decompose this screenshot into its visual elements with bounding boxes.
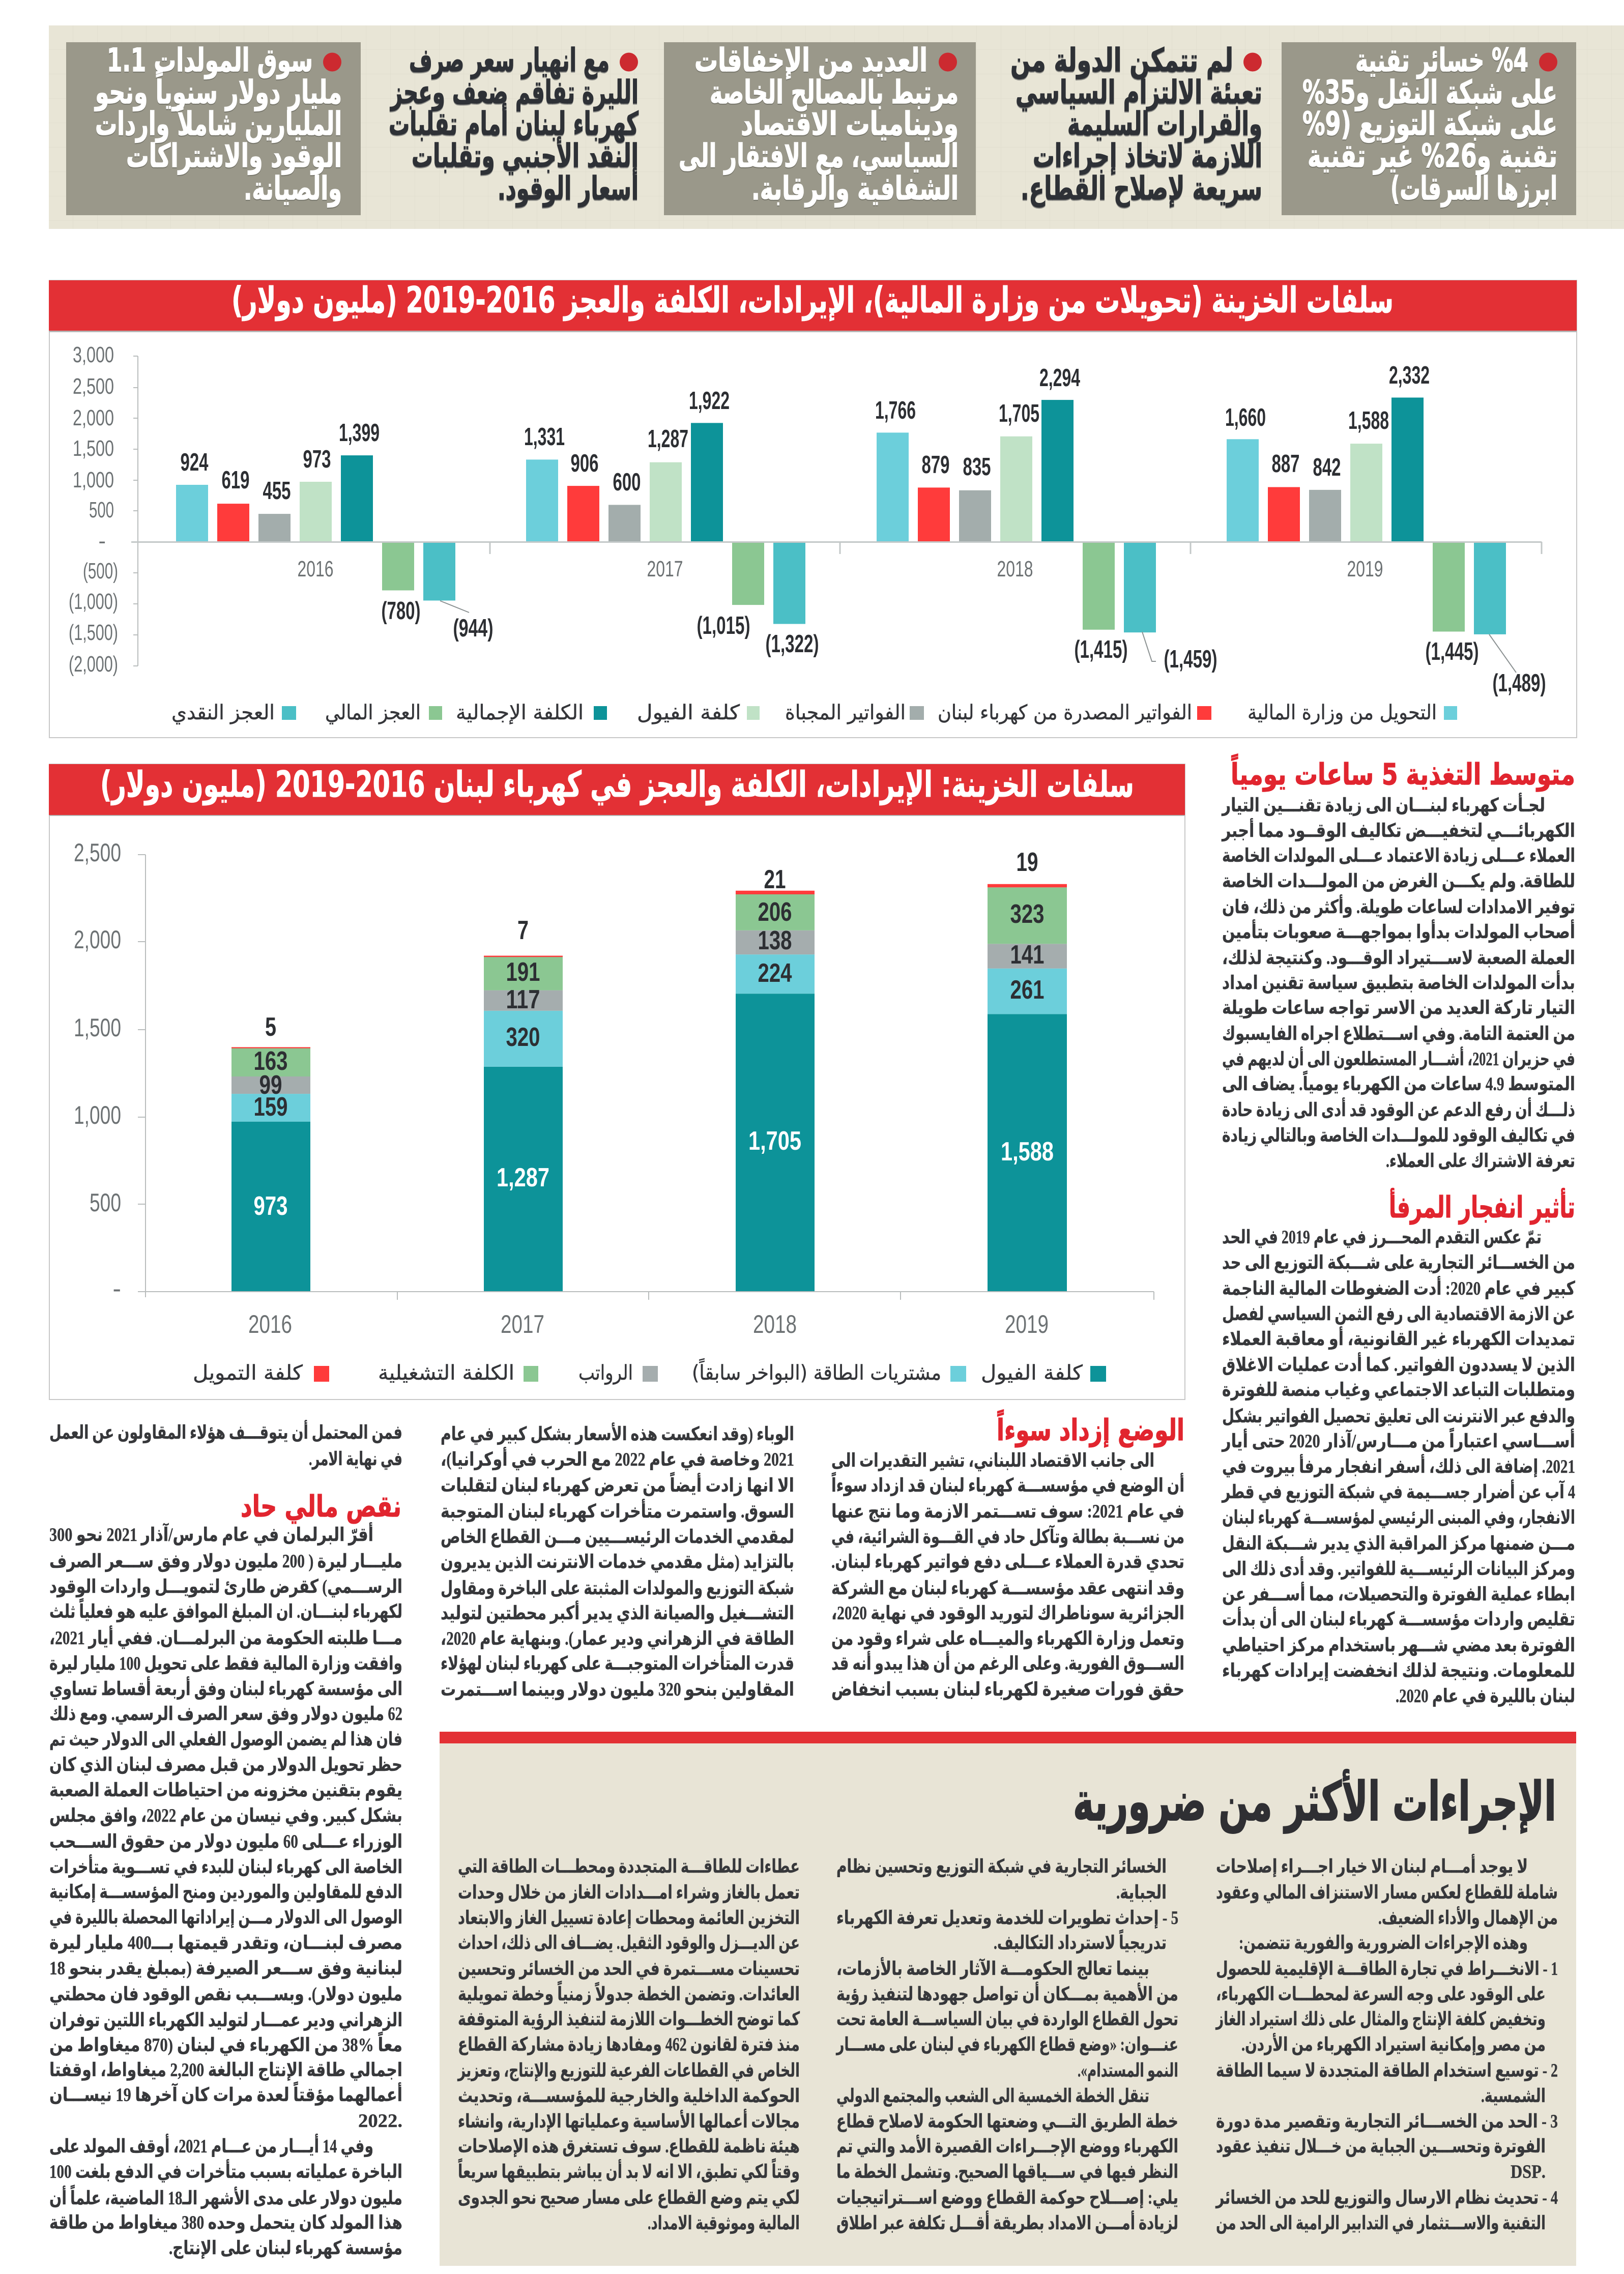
- chart title: سلفات الخزينة: الإيرادات، الكلفة والعجز في كهرباء لبنان 2016-2019 (مليون دولار): [100, 764, 1134, 806]
- text column: left: منذ فترة لقانون 462 ومفادها زيادة مشاركة القطاع: [458, 2034, 800, 2055]
- year labels: [248, 1310, 1049, 1338]
- text block: situation worsened: الى جانب الاقتصاد اللبناني، تشير التقديرات الى: [831, 1450, 1154, 1471]
- stacked data labels: 1,588: [1001, 1137, 1054, 1167]
- text column: middle: خطة الطريق التـــي وضعتها الحكومة لاصلاح قطاع: [836, 2111, 1178, 2132]
- data labels: 1,766: [875, 397, 916, 424]
- text block: situation worsened: من نســـبة بطالة وتآكل حاد في القـــوة الشرائية، في: [831, 1525, 1184, 1548]
- year labels: 2016: [297, 557, 334, 581]
- icon: red bullet political commitment: [1243, 53, 1262, 71]
- year labels: 2018: [997, 557, 1033, 581]
- text column: right: .DSP: [1511, 2162, 1546, 2182]
- text block: situation worsened: وتعمل وزارة الكهرباء والميـــاه على شراء وقود من: [831, 1628, 1184, 1649]
- text block: middle column: السوق. واستمرت متأخرات كهرباء لبنان المتوجبة: [441, 1499, 794, 1522]
- stacked data labels: 224: [758, 958, 792, 988]
- stacked data labels: 19: [1017, 848, 1038, 877]
- text column: left: العائدات. وتضمن الخطة جدولاً زمنياً وخطة تمويلية: [458, 1980, 800, 2005]
- data labels: 1,705: [999, 400, 1039, 427]
- callout: failures: السياسي، مع الافتقار الى: [679, 137, 959, 174]
- text block: middle column: التشـــغيل والصيانة الذي يدير أكبر محطتين لتوليد: [441, 1600, 794, 1624]
- icon: red bullet generators market: [323, 53, 341, 71]
- icon: red bullet exchange rate: [620, 53, 638, 71]
- callout: political commitment: تعبئة الالتزام السياسي: [1016, 74, 1262, 111]
- text block: middle column: المقاولين بنحو 320 مليون دولار وبينما اســـتمرت: [441, 1679, 794, 1700]
- text column: left: لكي يتم وضع القطاع على مسار صحيح نحو الجدوى: [458, 2188, 800, 2208]
- text column: middle: تحول القطاع الواردة في بيان السياســـة العامة تحت: [836, 2009, 1178, 2030]
- y axis: (1,000): [69, 589, 118, 614]
- stacked data labels: 163: [253, 1046, 288, 1076]
- text block: fiscal shortage: مـــا طلبته الحكومة من البرلمـــان. ففي أيار 2021،: [49, 1625, 402, 1649]
- text block: fiscal shortage: أعمالهما مؤقتاً لعدة مرات كان آخرها 19 نيســـان: [49, 2081, 402, 2106]
- data labels: [180, 362, 1546, 697]
- text column: left: الخاص في القطاعات الفرعية للتوزيع والإنتاج، وتعزيز: [457, 2060, 800, 2081]
- year labels: 2019: [1347, 557, 1383, 581]
- text column: middle: 5 - إحداث تطويرات للخدمة وتعديل تعرفة الكهرباء: [836, 1908, 1178, 1929]
- panel: stacked cost chart: [49, 764, 1185, 1400]
- data labels: (1,489): [1493, 669, 1546, 697]
- text block: middle column: 2021 وخاصة في عام 2022 مع الحرب في أوكرانيا)،: [441, 1447, 794, 1471]
- y axis: 1,500: [73, 436, 114, 461]
- text block: fiscal shortage: الى مؤسسة كهرباء لبنان وفق أربعة أقساط تساوي: [49, 1676, 402, 1700]
- text block: left column intro: فمن المحتمل أن يتوقـــف هؤلاء المقاولون عن العمل: [49, 1420, 402, 1443]
- text block: average supply: المتوسط 4.9 ساعات من الكهرباء يومياً. يضاف الى: [1222, 1070, 1575, 1095]
- text block: fiscal shortage: فان هذا لم يضمن الوصول الفعلي الى الدولار حيث تم: [49, 1729, 402, 1750]
- text block: port explosion: تمّ عكس التقدم المحـــرز في عام 2019 في الحد: [1222, 1227, 1542, 1248]
- y axis: 500: [89, 498, 114, 522]
- y axis: [74, 838, 146, 1303]
- icon: red bullet failures: [939, 53, 957, 71]
- text column: middle: لزيادة أمـــن الامداد بطريقة أقـــل تكلفة عبر اطلاق: [836, 2210, 1178, 2234]
- callout: exchange rate: مع انهيار سعر صرف: [409, 42, 610, 79]
- text block: average supply: لجـأت كهرباء لبنـــان الى زيادة تقنـــين التيار: [1221, 793, 1545, 816]
- y axis: 1,500: [74, 1013, 121, 1042]
- text block: fiscal shortage: وفي 14 أيـــار من عـــام 2021، أوقف المولد على: [49, 2134, 373, 2158]
- callout: political commitment: سريعة لإصلاح القطاع.: [1021, 170, 1262, 208]
- y axis: 500: [90, 1188, 121, 1217]
- y axis: 3,000: [73, 342, 114, 367]
- callout: political commitment: اللازمة لاتخاذ إجراءات: [1033, 137, 1262, 175]
- text block: fiscal shortage: حظر تحويل الدولار من قبل مصرف لبنان الذي كان: [49, 1755, 402, 1775]
- data labels: 842: [1313, 454, 1341, 481]
- y axis: (1,500): [69, 620, 118, 645]
- text block: fiscal shortage: أقرّ البرلمان في عام مارس/آذار 2021 نحو 300: [49, 1522, 373, 1546]
- callout: generators market: مليار دولار سنوياً ونحو: [94, 70, 342, 111]
- text block: port explosion: أســـاسي اعتباراً من مـــارس/آذار 2020 حتى أيار: [1221, 1427, 1575, 1452]
- callout: exchange rate: كهرباء لبنان أمام تقلبات: [389, 103, 639, 143]
- text column: middle: النظر فيها في ســـياقها الصحيح. وتشمل الخطة ما: [836, 2162, 1178, 2182]
- text block: fiscal shortage: لكهرباء لبنـــان. ان المبلغ الموافق عليه هو فعلياً ثلث: [49, 1598, 402, 1622]
- text column: right: لا يوجد أمـــام لبنان الا خيار اجـــراء إصلاحات: [1216, 1854, 1528, 1878]
- data labels: 1,922: [689, 387, 730, 415]
- legend: كلفة الفيول: [981, 1361, 1083, 1385]
- text column: left: وقتاً لكي تطبق، الا انه لا بد أن يباشر بتطبيقها سريعاً: [458, 2158, 800, 2182]
- y axis: 1,000: [73, 468, 114, 492]
- callout: failures: [679, 42, 959, 208]
- text column: right: [1215, 1854, 1558, 2234]
- text block: left column intro: في نهاية الامر.: [309, 1449, 402, 1470]
- text column: right: وهذه الإجراءات الضرورية والفورية تتضمن:: [1239, 1933, 1528, 1954]
- stacked data labels: [253, 848, 1054, 1221]
- text column: middle: من الأهمية بمـــكان أن تواصل جهودها لتنفيذ رؤية: [836, 1981, 1178, 2005]
- text block: situation worsened: [831, 1450, 1184, 1700]
- text column: left: الحوكمة الداخلية والخارجية للمؤسســـة، وتحديث: [458, 2086, 800, 2107]
- callout: generators market: المليارين شاملاً واردات: [95, 104, 342, 143]
- data labels: (1,322): [765, 630, 819, 658]
- data labels: 1,588: [1348, 407, 1389, 434]
- callout: failures: مرتبط بالمصالح الخاصة: [710, 74, 959, 111]
- y axis: (500): [83, 559, 118, 584]
- text block: fiscal shortage: الوصول الى الدولار مـــن إيراداتها المحصلة بالليرة في: [49, 1907, 402, 1928]
- y axis: -: [98, 529, 106, 553]
- data labels: 906: [571, 450, 598, 477]
- text block: left column intro: [49, 1420, 402, 1470]
- data labels: 1,660: [1225, 404, 1266, 431]
- stacked data labels: 21: [764, 865, 786, 894]
- text column: middle: يلي: إصـــلاح حوكمة القطاع ووضع اســـتراتيجيات: [836, 2188, 1178, 2208]
- data labels: 835: [963, 453, 991, 481]
- callout: technical losses: %4 خسائر تقنية: [1355, 42, 1528, 79]
- data labels: 619: [222, 467, 249, 494]
- text column: right: 3 - الحد من الخســـائر التجارية وتقصير مدة دورة: [1216, 2111, 1558, 2132]
- text block: fiscal shortage: لبنانية وفق ســـعر الصيرفة (بمبلغ يقدر بنحو 18: [49, 1958, 402, 1979]
- box: generators market background: [66, 42, 361, 215]
- y axis: 2,500: [74, 838, 121, 867]
- year labels: 2017: [501, 1310, 544, 1338]
- text block: port explosion: لبنان بالليرة في عام 2020.: [1396, 1686, 1575, 1707]
- callout: political commitment: لم تتمكن الدولة من: [1010, 42, 1233, 79]
- legend: كلفة التمويل: [193, 1361, 303, 1385]
- stacked data labels: 5: [265, 1012, 276, 1042]
- data labels: 1,399: [339, 419, 380, 447]
- data labels: 1,331: [524, 423, 565, 451]
- text block: situation worsened: أن الوضع في مؤسســـة كهرباء لبنان قد ازداد سوءاً: [831, 1472, 1184, 1496]
- y axis: -: [112, 1274, 121, 1303]
- callout: generators market: [94, 42, 342, 208]
- icon: red bullet technical losses: [1539, 53, 1557, 71]
- callout: exchange rate: الليرة تفاقم ضعف وعجز: [390, 74, 639, 111]
- stacked data labels: 141: [1010, 940, 1044, 970]
- callout: technical losses: تقنية و26% غير تقنية: [1308, 137, 1557, 175]
- text block: fiscal shortage: مؤسسة كهرباء لبنان على الإنتاج.: [169, 2238, 402, 2259]
- stacked bars: [138, 884, 1154, 1300]
- text block: middle column: لمقدمي الخدمات الرئيســـيين مـــن القطاع الخاص: [441, 1527, 794, 1548]
- text block: fiscal shortage: معاً %38 من الكهرباء في لبنان (870 ميغاواط من: [49, 2031, 402, 2056]
- legend: الكلفة الإجمالية: [456, 701, 584, 724]
- callout: exchange rate: النقد الأجنبي وتقلبات: [412, 136, 639, 175]
- data labels: (944): [453, 615, 494, 642]
- text block: fiscal shortage: الباخرة عملياته بسبب متأخرات في الدفع بلغت 100: [49, 2159, 402, 2182]
- heading: fiscal shortage: نقص مالي حاد: [241, 1489, 401, 1524]
- text block: situation worsened: الجزائرية سوناطراك لتوريد الوقود في نهاية 2020،: [831, 1603, 1184, 1624]
- text column: middle: تدريجياً لاسترداد التكاليف.: [994, 1929, 1167, 1954]
- text block: average supply: [1221, 793, 1575, 1172]
- text block: fiscal shortage: الدفع للمقاولين والموردين ومنح المؤسســـة إمكانية: [49, 1882, 402, 1903]
- text column: middle: بينما تعالج الحكومـــة الآثار الخاصة بالأزمات،: [836, 1957, 1149, 1979]
- callout: generators market: والصيانة.: [244, 170, 342, 208]
- text block: fiscal shortage: الوزراء عـــلى 60 مليون دولار من حقوق الســـحب: [49, 1831, 402, 1852]
- panel: most necessary measures: [440, 1732, 1576, 2266]
- stacked data labels: 117: [506, 985, 540, 1014]
- stacked data labels: 7: [517, 916, 529, 945]
- text column: middle: تنقل الخطة الخمسية الى الشعب والمجتمع الدولي: [836, 2086, 1149, 2107]
- callout: political commitment: والقرارات السليمة: [1067, 105, 1262, 143]
- callout: exchange rate: أسعار الوقود.: [498, 167, 639, 208]
- text block: fiscal shortage: مليـــار ليرة ( 200 مليون دولار وفق ســـعر الصرف: [49, 1551, 402, 1572]
- panel: treasury advances chart: [49, 279, 1577, 738]
- stacked data labels: 191: [506, 957, 540, 987]
- data labels: (1,445): [1426, 638, 1478, 665]
- text column: middle: الكهرباء ووضع الإجـــراءات القصيرة الأمد والتي تم: [836, 2134, 1178, 2157]
- text column: left: [457, 1856, 800, 2234]
- text block: fiscal shortage: [49, 1522, 402, 2259]
- stacked data labels: 973: [253, 1191, 288, 1221]
- data labels: (1,015): [697, 612, 750, 639]
- stacked data labels: 1,287: [497, 1163, 549, 1192]
- callout: generators market: الوقود والاشتراكات: [126, 137, 342, 175]
- stacked data labels: 206: [758, 897, 792, 927]
- legend: العجز المالي: [325, 701, 421, 724]
- legend: التحويل من وزارة المالية: [1248, 701, 1437, 724]
- box: failures background: [664, 42, 976, 215]
- bars: [131, 398, 1542, 673]
- text block: situation worsened: وقد انتهى عقد مؤسســـة كهرباء لبنان مع الشركة: [831, 1578, 1184, 1599]
- callout: failures: وديناميات الاقتصاد: [741, 105, 959, 143]
- stacked data labels: 159: [253, 1092, 288, 1122]
- text block: average supply: في حزيران 2021، أشـــار المستطلعون الى أن لديهم في: [1222, 1046, 1575, 1070]
- text block: fiscal shortage: هذا المولد كان يتحمل وحده 380 ميغاواط من طاقة: [49, 2212, 402, 2233]
- year labels: 2018: [753, 1310, 797, 1338]
- text block: middle column: الا انها زادت أيضاً من تعرض كهرباء لبنان لتقلبات: [441, 1472, 794, 1496]
- text block: fiscal shortage: مصرف لبنـــان، وتقدر قيمتها بـــ400 مليار ليرة: [49, 1933, 402, 1954]
- callout: exchange rate: [389, 42, 639, 208]
- text column: middle: الجباية.: [1116, 1882, 1167, 1903]
- text block: fiscal shortage: الخاصة الى كهرباء لبنان للبدء في تســـوية متأخرات: [49, 1854, 402, 1878]
- text column: middle: الخسائر التجارية في شبكة التوزيع وتحسين نظام: [836, 1856, 1167, 1878]
- data labels: 455: [263, 477, 291, 505]
- stacked data labels: 99: [259, 1070, 282, 1100]
- legend: كلفة الفيول: [637, 701, 740, 724]
- callout: failures: الشفافية والرقابة.: [751, 170, 959, 208]
- heading: average supply: متوسط التغذية 5 ساعات يومياً: [1231, 753, 1575, 792]
- legend: الكلفة التشغيلية: [378, 1361, 514, 1385]
- callout: political commitment: [1010, 42, 1262, 208]
- legend: الفواتير المصدرة من كهرباء لبنان: [938, 701, 1192, 724]
- data labels: (1,459): [1164, 646, 1217, 673]
- text block: fiscal shortage: يقوم بتقنين مخزونه من احتياطات العملة الصعبة: [49, 1780, 402, 1801]
- stacked data labels: 138: [758, 926, 792, 955]
- text column: middle: [836, 1856, 1178, 2234]
- y axis: [69, 342, 138, 677]
- text column: left: المالية وموثوقية الامداد.: [648, 2213, 800, 2234]
- y axis: (2,000): [69, 652, 118, 677]
- text block: middle column: بالتزايد (مثل مقدمي خدمات الانترنت الذين يديرون: [441, 1552, 794, 1572]
- callout: generators market: سوق المولدات 1.1: [107, 42, 313, 79]
- legend: [193, 1358, 1106, 1385]
- text column: right: من الإهمال والأداء الضعيف.: [1378, 1906, 1558, 1929]
- text column: left: مجالات أعمالها الأساسية وعملياتها الإدارية، وانشاء: [458, 2109, 800, 2132]
- data labels: 973: [303, 446, 331, 473]
- text block: middle column: قدرت المتأخرات المتوجبـــة على كهرباء لبنان لهؤلاء: [441, 1651, 794, 1674]
- heading: situation worsened: الوضع إزداد سوءاً: [997, 1409, 1184, 1448]
- legend: العجز النقدي: [171, 701, 275, 724]
- text block: situation worsened: الســـوق الفورية. وعلى الرغم من أن هذا يبدو أنه قد: [831, 1651, 1184, 1674]
- stacked data labels: 261: [1010, 975, 1044, 1005]
- y axis: 1,000: [74, 1101, 121, 1129]
- text block: port explosion: [1221, 1227, 1575, 1707]
- box: technical losses background: [1282, 42, 1576, 215]
- data labels: (780): [382, 597, 420, 625]
- legend: [171, 701, 1457, 724]
- text column: left: عن الديـــزل والوقود الثقيل. يضـــاف الى ذلك، احداث: [458, 1933, 800, 1954]
- text block: fiscal shortage: الزهراني ودير عمـــار لتوليد الكهرباء اللتين توفران: [49, 2010, 402, 2031]
- text column: middle: عنـــوان: «وضع قطاع الكهرباء في لبنان على مســـار: [836, 2034, 1178, 2055]
- y axis: 2,500: [73, 374, 114, 399]
- stacked data labels: 323: [1010, 899, 1044, 929]
- legend: الفواتير المجباة: [785, 701, 906, 724]
- year labels: 2016: [248, 1310, 292, 1338]
- data labels: 2,332: [1389, 362, 1430, 389]
- text block: fiscal shortage: بشكل كبير. وفي نيسان من عام 2022، وافق مجلس: [49, 1805, 402, 1827]
- text block: fiscal shortage: .2022: [358, 2111, 402, 2132]
- text block: situation worsened: تحدي قدرة العملاء عـــلى دفع فواتير كهرباء لبنان.: [831, 1552, 1184, 1572]
- callout: technical losses: [1302, 42, 1557, 207]
- data labels: (1,415): [1075, 636, 1127, 663]
- text column: left: تعمل بالغاز وشراء امـــدادات الغاز من خلال وحدات: [458, 1882, 800, 1903]
- data labels: 2,294: [1039, 364, 1080, 392]
- text block: middle column: [441, 1422, 794, 1700]
- text block: fiscal shortage: اجمالي طاقة الإنتاج البالغة 2,200 ميغاواط، اوقفتا: [49, 2060, 402, 2081]
- data labels: 879: [922, 451, 949, 479]
- text block: middle column: الوباء (وقد انعكست هذه الأسعار بشكل كبير في عام: [441, 1422, 794, 1445]
- text block: fiscal shortage: وافقت وزارة المالية فقط على تحويل 100 مليار ليرة: [49, 1653, 402, 1674]
- text block: fiscal shortage: الرســـمي) كقرض طارئ لتمويـــل واردات الوقود: [49, 1577, 402, 1597]
- text column: left: كما توضح الخطـــوات اللازمة لتنفيذ الرؤية المتوقفة: [458, 2009, 800, 2030]
- panel: key findings band: [49, 25, 1624, 229]
- text column: right: الشمسية.: [1481, 2086, 1546, 2107]
- text block: port explosion: 2021. إضافة الى ذلك، أسفر انفجار مرفأ بيروت في: [1222, 1454, 1575, 1477]
- y axis: 2,000: [74, 925, 121, 954]
- text block: fiscal shortage: مليون دولار). وبســـبب نقص الوقود فان محطتي: [49, 1984, 402, 2005]
- data labels: 887: [1272, 450, 1299, 478]
- text block: port explosion: كبير في عام 2020: أدت الضغوطات المالية الناجمة: [1222, 1276, 1575, 1300]
- text block: middle column: الطاقة في الزهراني ودير عمار). وبنهاية عام 2020،: [441, 1628, 794, 1650]
- legend: مشتريات الطاقة (البواخر سابقاً): [692, 1358, 941, 1385]
- text block: situation worsened: في عام 2021: سوف تســـتمر الازمة وما نتج عنها: [831, 1501, 1184, 1523]
- y axis: 2,000: [73, 405, 114, 430]
- legend: الرواتب: [578, 1361, 633, 1385]
- text block: middle column: شبكة التوزيع والمولدات المثبتة على الباخرة ومقاول: [441, 1578, 794, 1599]
- year labels: 2017: [647, 557, 683, 581]
- text column: left: هيئة ناظمة للقطاع. سوف تستغرق هذه الإصلاحات: [458, 2136, 800, 2157]
- stacked data labels: 320: [506, 1023, 540, 1052]
- text block: fiscal shortage: مليون دولار على مدى الأشهر الـ18 الماضية، علماً أن: [49, 2184, 402, 2209]
- text block: situation worsened: حقق فورات صغيرة لكهرباء لبنان بسبب انخفاض: [831, 1679, 1184, 1700]
- text column: middle: النمو المستدام».: [1078, 2060, 1178, 2082]
- text column: left: عطاءات للطاقـــة المتجددة ومحطـــات الطاقة التي: [458, 1856, 800, 1877]
- text column: left: التخزين العائمة ومحطات إعادة تسييل الغاز والابتعاد: [458, 1908, 800, 1929]
- year labels: [297, 557, 1383, 581]
- data labels: 1,287: [648, 425, 688, 453]
- data labels: 600: [613, 469, 641, 496]
- text column: left: تحسينات مســـتمرة في الحد من الخسائر وتحسين: [458, 1959, 800, 1979]
- stacked data labels: 1,705: [748, 1126, 801, 1156]
- data labels: 924: [180, 449, 209, 476]
- year labels: 2019: [1005, 1310, 1049, 1338]
- callout: failures: العديد من الإخفاقات: [694, 42, 927, 79]
- text block: fiscal shortage: 62 مليون دولار وفق سعر الصرف الرسمي. ومع ذلك: [49, 1704, 402, 1725]
